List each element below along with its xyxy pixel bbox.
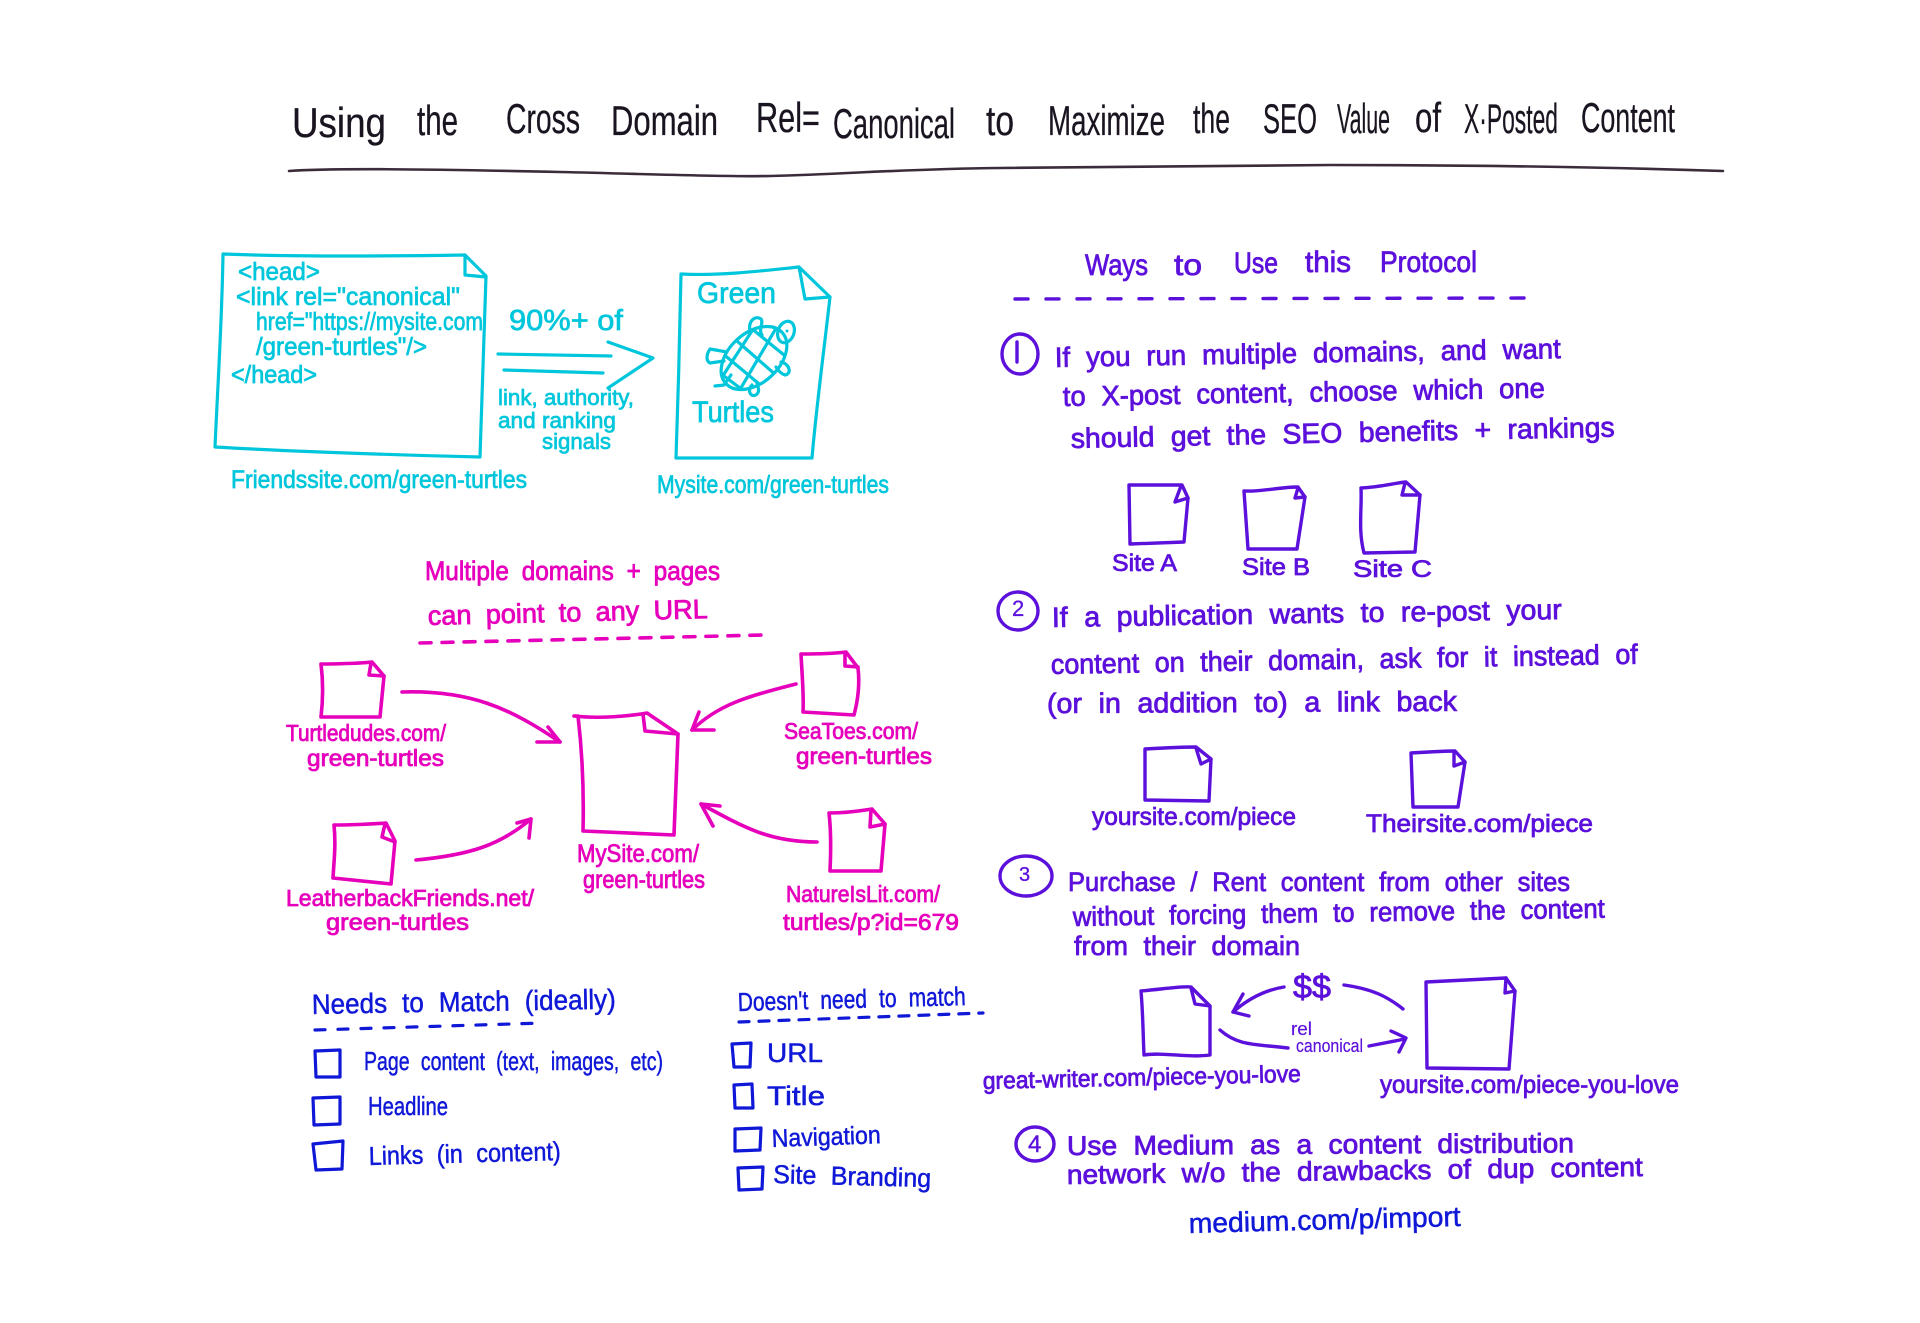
text: item 4 bbox=[1067, 1128, 1644, 1190]
labels: yoursite and theirsite: yoursite.com/piece bbox=[1092, 803, 1296, 831]
text: item 1: to X-post content, choose which one bbox=[1063, 373, 1545, 412]
text: item 3: from their domain bbox=[1074, 931, 1300, 961]
label: MySite: green-turtles bbox=[583, 866, 705, 894]
money symbols: $$ bbox=[1293, 968, 1331, 1005]
label: 90%: 90%+ of bbox=[509, 305, 624, 337]
signals caption bbox=[498, 385, 634, 454]
document: Mysite green turtles: Green bbox=[697, 277, 776, 310]
item 1 bbox=[1002, 333, 1615, 583]
icon: number 2 bbox=[998, 592, 1038, 630]
label: great-writer URL: great-writer.com/piece-you-love bbox=[983, 1061, 1301, 1095]
title: Domain bbox=[611, 97, 718, 144]
checkbox: title bbox=[734, 1081, 825, 1111]
checkbox: URL bbox=[732, 1038, 823, 1068]
panel: multiple domains diagram bbox=[286, 556, 959, 935]
title: the bbox=[1193, 95, 1230, 142]
document: NatureIsLit bbox=[829, 809, 885, 871]
arrow: LeatherbackFriends to MySite bbox=[416, 819, 531, 860]
document: Turtledudes bbox=[321, 662, 384, 717]
title: SEO bbox=[1263, 95, 1317, 142]
heading: doesn't need to match: Doesn't need to match bbox=[737, 981, 966, 1017]
checkbox: title: Title bbox=[767, 1081, 825, 1111]
arrow: Turtledudes to MySite bbox=[402, 692, 560, 742]
heading: multiple domains: can point to any URL bbox=[427, 594, 708, 631]
documents: sites A B C bbox=[1129, 482, 1420, 553]
title underline bbox=[289, 165, 1723, 176]
label: NatureIsLit: NatureIsLit.com/ bbox=[786, 881, 941, 907]
heading: ways to use: Protocol bbox=[1380, 246, 1477, 279]
heading: ways to use bbox=[1085, 246, 1477, 282]
heading: needs to match: Needs to Match (ideally) bbox=[312, 984, 616, 1020]
text: item 1: should get the SEO benefits + rankings bbox=[1070, 412, 1615, 454]
title: X·Posted bbox=[1464, 95, 1558, 142]
document: yoursite bbox=[1426, 978, 1515, 1069]
icon: number 1 bbox=[1002, 334, 1038, 374]
text: item 2: If a publication wants to re-post your bbox=[1052, 594, 1562, 633]
title: of bbox=[1415, 94, 1441, 141]
labels: sites: Site A bbox=[1112, 550, 1177, 577]
signals caption: and ranking bbox=[498, 408, 616, 433]
icon: turtle bbox=[705, 316, 796, 398]
title: Rel= bbox=[756, 94, 820, 141]
checkbox: page content: Page content (text, images, etc) bbox=[364, 1046, 663, 1076]
code snippet: href="https://mysite.com bbox=[256, 308, 483, 336]
title: Value bbox=[1337, 95, 1390, 142]
item 3 bbox=[983, 856, 1679, 1099]
label: NatureIsLit: turtles/p?id=679 bbox=[783, 909, 959, 935]
signals caption: link, authority, bbox=[498, 385, 634, 410]
label: SeaToes: green-turtles bbox=[796, 743, 932, 769]
title: to bbox=[986, 97, 1014, 144]
arrow: rel canonical: rel bbox=[1291, 1019, 1312, 1039]
panel: does not need to match checklist bbox=[732, 981, 983, 1193]
arrow: SeaToes to MySite bbox=[692, 684, 796, 730]
arrow: rel canonical bbox=[1220, 1019, 1406, 1056]
checkbox: page content bbox=[315, 1046, 663, 1077]
label: LeatherbackFriends: green-turtles bbox=[326, 909, 469, 935]
dashed underline bbox=[739, 1013, 983, 1022]
icon: number 2: 2 bbox=[1012, 596, 1024, 621]
label: NatureIsLit bbox=[783, 881, 959, 935]
checkbox: headline bbox=[313, 1091, 448, 1125]
arrow: double shaft arrow bbox=[498, 342, 653, 388]
labels: sites: Site B bbox=[1242, 554, 1310, 581]
text: item 3: without forcing them to remove the content bbox=[1072, 894, 1605, 932]
label: LeatherbackFriends bbox=[286, 885, 535, 935]
checkbox: URL: URL bbox=[767, 1038, 823, 1068]
checkbox: site branding: Site Branding bbox=[773, 1159, 932, 1193]
icon: number 4 bbox=[1016, 1127, 1054, 1161]
heading: multiple domains: Multiple domains + pages bbox=[425, 556, 720, 586]
panel: cross-domain canonical example bbox=[215, 254, 889, 499]
checkbox: links: Links (in content) bbox=[368, 1136, 561, 1171]
dashed underline bbox=[1015, 298, 1528, 299]
text: item 2 bbox=[1047, 594, 1638, 719]
item 2 bbox=[998, 592, 1638, 838]
heading: ways to use: Ways bbox=[1085, 249, 1148, 282]
code snippet bbox=[231, 258, 483, 389]
label: Mysite URL: Mysite.com/green-turtles bbox=[657, 471, 889, 499]
text: item 3: Purchase / Rent content from other sites bbox=[1068, 867, 1570, 897]
text: item 1 bbox=[1055, 333, 1615, 454]
title: the bbox=[417, 97, 458, 144]
heading: ways to use: this bbox=[1305, 246, 1351, 279]
documents: yoursite and theirsite bbox=[1145, 747, 1465, 807]
arrow: payment to great-writer bbox=[1233, 985, 1403, 1016]
title: Using bbox=[292, 99, 386, 146]
code snippet: </head> bbox=[231, 361, 317, 389]
checkbox: headline: Headline bbox=[368, 1091, 448, 1121]
document: Friendssite code page bbox=[215, 254, 486, 457]
text: item 2: content on their domain, ask for it instead of bbox=[1051, 639, 1638, 680]
panel: needs to match checklist bbox=[312, 984, 663, 1171]
icon: number 3 bbox=[1000, 856, 1052, 896]
arrow: NatureIsLit to MySite bbox=[701, 804, 817, 842]
labels: yoursite and theirsite: Theirsite.com/piece bbox=[1366, 810, 1593, 838]
label: MySite bbox=[577, 840, 705, 894]
document: Mysite green turtles: Turtles bbox=[692, 396, 774, 429]
labels: yoursite and theirsite bbox=[1092, 803, 1593, 838]
document: SeaToes bbox=[801, 652, 859, 715]
code snippet: <head> bbox=[238, 258, 320, 286]
document: great-writer bbox=[1141, 987, 1210, 1056]
heading: multiple domains bbox=[425, 556, 720, 631]
label: SeaToes bbox=[784, 718, 932, 769]
text: item 2: (or in addition to) a link back bbox=[1047, 686, 1458, 719]
arrow: rel canonical: canonical bbox=[1296, 1036, 1363, 1056]
label: Friendssite URL: Friendssite.com/green-turtles bbox=[231, 466, 527, 494]
label: SeaToes: SeaToes.com/ bbox=[784, 718, 919, 744]
title bbox=[292, 94, 1675, 147]
item 4 bbox=[1016, 1127, 1644, 1239]
code snippet: /green-turtles"/> bbox=[256, 333, 427, 361]
document: MySite center bbox=[574, 713, 678, 835]
heading: ways to use: to bbox=[1174, 249, 1202, 282]
signals caption: signals bbox=[542, 429, 611, 454]
panel: ways to use this protocol bbox=[983, 246, 1679, 1239]
label: yoursite URL: yoursite.com/piece-you-love bbox=[1380, 1071, 1679, 1099]
labels: sites bbox=[1112, 550, 1432, 583]
link: medium import: medium.com/p/import bbox=[1188, 1201, 1461, 1239]
text: item 1: If you run multiple domains, and want bbox=[1055, 333, 1561, 373]
document: Mysite green turtles bbox=[676, 267, 830, 458]
dashed underline bbox=[315, 1023, 543, 1030]
label: Turtledudes bbox=[286, 720, 447, 771]
labels: sites: Site C bbox=[1353, 556, 1432, 583]
heading: ways to use: Use bbox=[1234, 247, 1278, 280]
label: Turtledudes: Turtledudes.com/ bbox=[286, 720, 447, 746]
text: item 4: Use Medium as a content distribution bbox=[1067, 1128, 1574, 1161]
text: item 4: network w/o the drawbacks of dup content bbox=[1067, 1152, 1644, 1190]
icon: number 3: 3 bbox=[1019, 864, 1030, 886]
title: Maximize bbox=[1048, 97, 1165, 144]
icon: number 4: 4 bbox=[1028, 1131, 1041, 1158]
text: item 3 bbox=[1068, 867, 1605, 961]
checkbox: navigation: Navigation bbox=[771, 1121, 881, 1153]
label: Turtledudes: green-turtles bbox=[307, 745, 444, 771]
title: Cross bbox=[506, 95, 580, 142]
dashed underline bbox=[420, 635, 765, 643]
code snippet: <link rel="canonical" bbox=[236, 283, 460, 311]
title: Canonical bbox=[833, 100, 955, 147]
label: MySite: MySite.com/ bbox=[577, 840, 699, 868]
label: LeatherbackFriends: LeatherbackFriends.net/ bbox=[286, 885, 535, 911]
document: LeatherbackFriends bbox=[333, 823, 395, 884]
title: Content bbox=[1581, 94, 1675, 141]
